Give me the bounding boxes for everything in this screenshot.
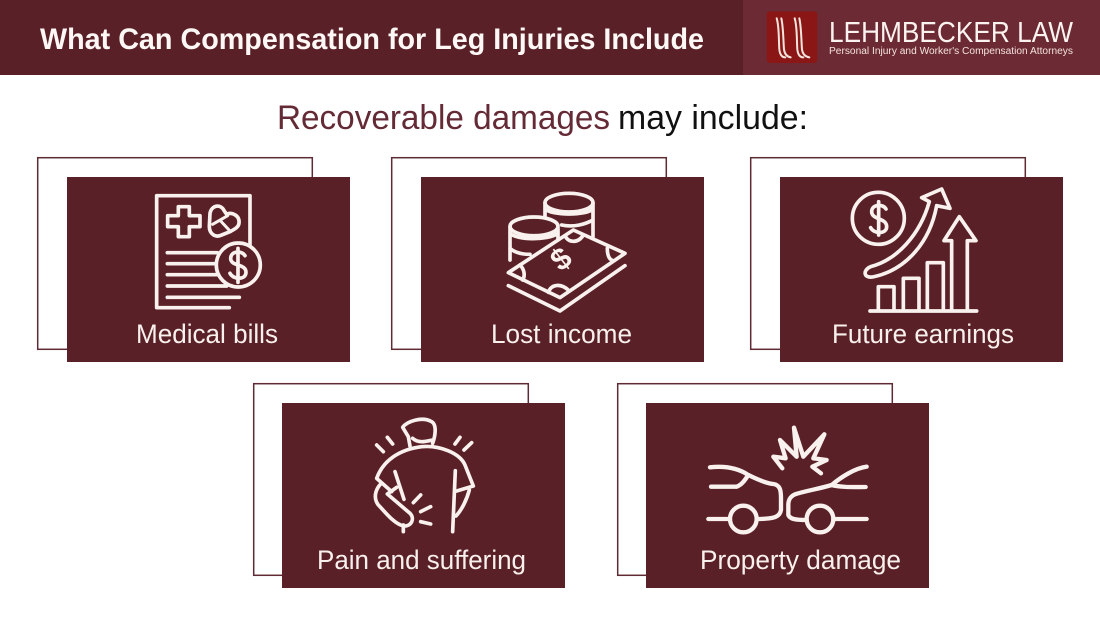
logo name: LEHMBECKER LAW (829, 17, 1074, 49)
label: Pain and suffering (317, 545, 526, 575)
panel: medical bills (38, 158, 350, 362)
logo panel (743, 0, 1100, 75)
icon: back pain (375, 419, 473, 532)
label: Lost income (491, 319, 632, 349)
panel: property damage (618, 384, 929, 588)
logo tagline: Personal Injury and Worker's Compensation Attorneys (829, 46, 1073, 57)
title: What Can Compensation for Leg Injuries Include (40, 23, 704, 56)
label: Property damage (700, 545, 901, 575)
label: Future earnings (832, 319, 1014, 349)
header band (0, 0, 1100, 75)
subheading: Recoverable damages (277, 99, 610, 137)
icon: medical bill (157, 196, 260, 308)
icon: coins and cash (508, 193, 625, 311)
label: Medical bills (136, 319, 278, 349)
icon: dollar sign on bill: $ (544, 241, 578, 278)
panel: lost income (392, 158, 704, 362)
icon: car crash (708, 428, 867, 532)
panel: pain and suffering (254, 384, 565, 588)
panel: future earnings (751, 158, 1063, 362)
icon: logo mark (767, 11, 817, 63)
icon: growth chart (852, 189, 977, 311)
subheading: may include: (618, 99, 808, 137)
